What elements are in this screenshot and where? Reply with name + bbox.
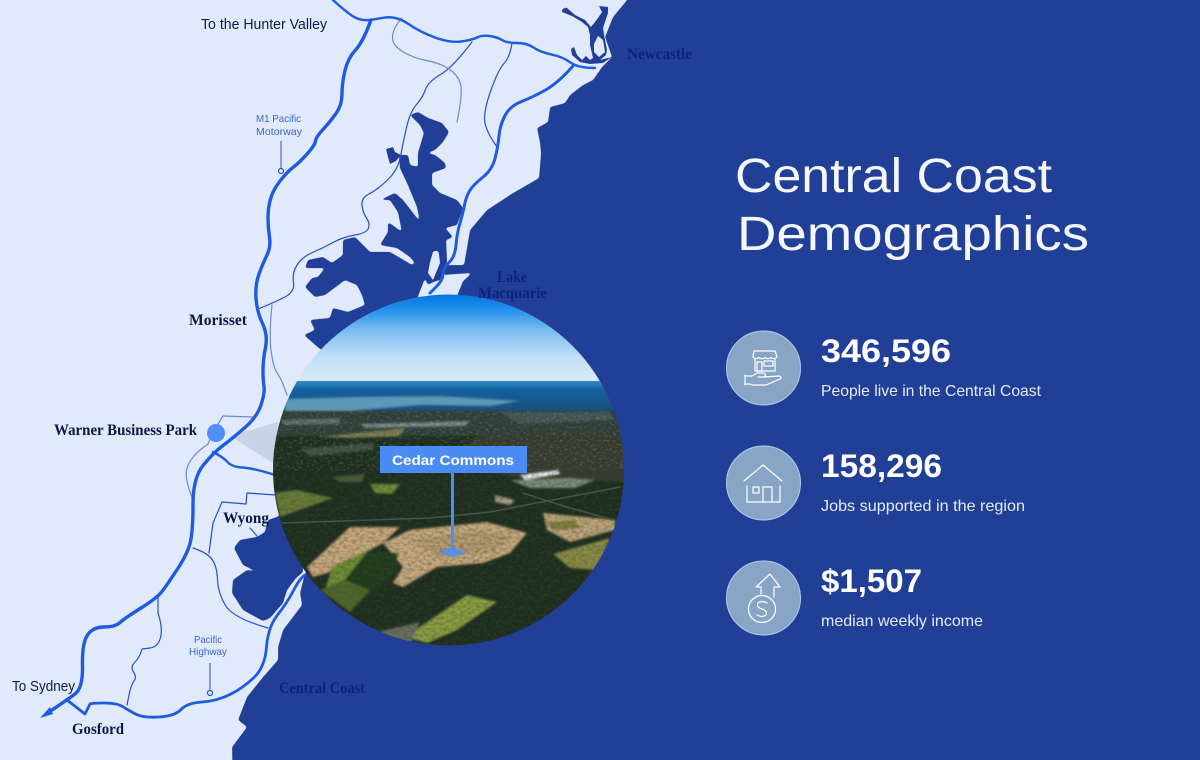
stat value: 346,596: 346,596: [821, 333, 951, 369]
map label: M1 Pacific Motorway: Motorway: [256, 126, 303, 138]
stat: jobs: [726, 446, 1025, 520]
map: Pacific Highway and northern roads: [67, 0, 595, 717]
photo label: Cedar Commons: Cedar Commons: [392, 452, 514, 468]
map: land mass: [0, 0, 640, 760]
icon: house: [744, 465, 782, 502]
map label: Pacific Highway: Highway: [189, 646, 228, 658]
icon: money with up arrow: [748, 574, 780, 622]
stat caption: income: median weekly income: [821, 613, 983, 630]
map: Tuggerah Lake water: [232, 500, 303, 621]
stat caption: jobs: Jobs supported in the region: [821, 498, 1025, 515]
map label: Lake Macquarie: [478, 269, 547, 302]
icon: shop in hand: [745, 351, 781, 385]
map label: Lake Macquarie: Macquarie: [478, 285, 547, 302]
stat value: $1,507: $1,507: [821, 563, 922, 599]
map: minor roads: [127, 42, 512, 705]
map label: M1 Pacific Motorway: [256, 113, 303, 174]
map label: Morisset: Morisset: [189, 312, 248, 329]
stat: population: [726, 331, 1042, 405]
map: Lake Macquarie water: [304, 112, 463, 360]
map label: Warner Business Park: Warner Business Park: [54, 422, 197, 439]
map marker: Warner Business Park: [207, 424, 225, 442]
title: Central Coast: [735, 150, 1052, 203]
map label: To the Hunter Valley: To the Hunter Valley: [201, 17, 328, 33]
map label: Newcastle: Newcastle: [627, 46, 692, 63]
stat caption: population: People live in the Central Coast: [821, 383, 1042, 400]
map label: Gosford: Gosford: [72, 721, 124, 738]
title: [735, 150, 1089, 261]
stat: income: [726, 561, 983, 635]
photo label: Cedar Commons: [380, 446, 527, 557]
title: Demographics: [737, 208, 1089, 261]
map: M1 Pacific Motorway: [40, 20, 371, 718]
map label: M1 Pacific Motorway: M1 Pacific: [256, 113, 301, 125]
map label: Pacific Highway: Pacific: [194, 634, 222, 646]
map label: Central Coast: Central Coast: [279, 680, 366, 697]
map: Newcastle estuary: [562, 6, 612, 64]
map: secondary grey roads: [186, 18, 461, 497]
map: view cone: [230, 422, 278, 463]
stat value: 158,296: 158,296: [821, 448, 942, 484]
map label: Lake Macquarie: Lake: [497, 269, 527, 286]
map label: To Sydney: To Sydney: [12, 679, 76, 695]
map label: Wyong: Wyong: [223, 510, 269, 527]
map label: Pacific Highway: [189, 634, 228, 696]
photo: aerial circle: [270, 290, 630, 651]
